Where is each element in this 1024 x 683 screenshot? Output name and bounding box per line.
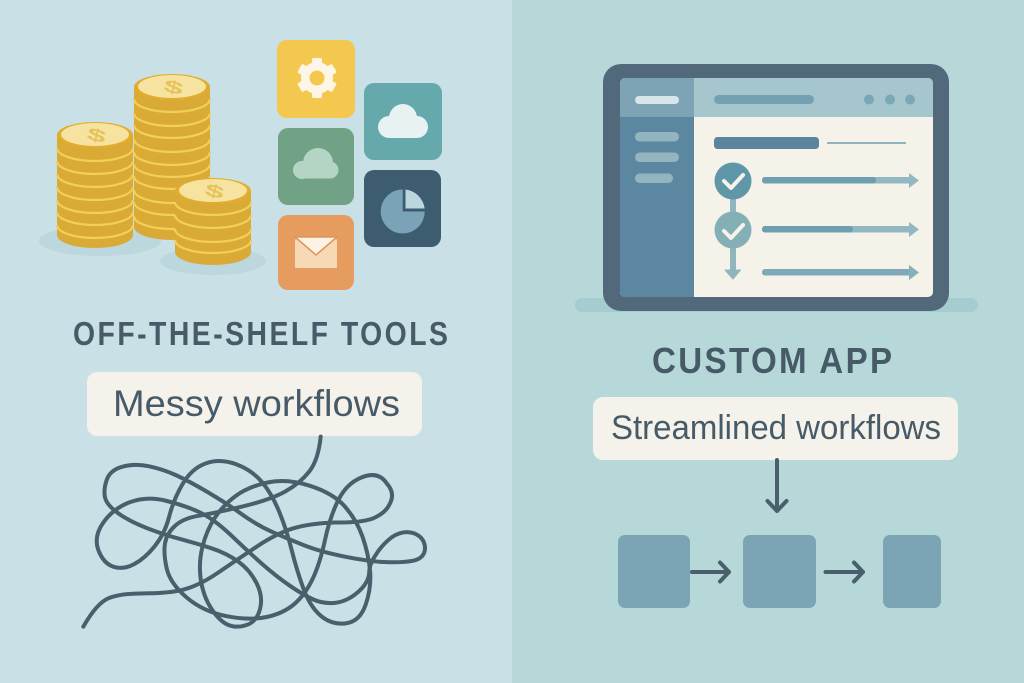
- process step 3: [883, 535, 941, 608]
- label: streamlined workflows: [593, 397, 958, 460]
- label: messy workflows: [87, 372, 422, 436]
- icon: green cloud tile: [278, 128, 354, 205]
- illustration: tablet with app: [575, 64, 978, 312]
- icon: stacks of coins: [39, 74, 266, 275]
- app content area: [620, 78, 933, 297]
- process step 2: [743, 535, 816, 608]
- coin stack: left: [57, 122, 133, 248]
- icon: yellow gear tile: [277, 40, 355, 118]
- heading: custom app: CUSTOM APP: [652, 342, 892, 381]
- icon: orange envelope tile: [278, 215, 354, 290]
- coin stack: tall: $: [162, 75, 185, 99]
- illustration: tangled line: [83, 437, 425, 627]
- workflow steps with checks: [714, 162, 752, 279]
- coin stack: short: $: [203, 179, 226, 203]
- coin stack: tall: [134, 74, 210, 240]
- label: messy workflows: Messy workflows: [113, 383, 400, 424]
- panel: off-the-shelf tools: [0, 0, 512, 683]
- heading: off-the-shelf tools: OFF-THE-SHELF TOOLS: [73, 315, 448, 353]
- arrow: step 2 to 3: [826, 562, 863, 582]
- app header bar: [694, 78, 933, 117]
- progress arrow 2: [762, 222, 919, 237]
- arrow: down to process: [768, 460, 786, 511]
- app sidebar: [620, 78, 694, 297]
- progress arrow 1: [762, 173, 919, 188]
- icon: teal cloud tile: [364, 83, 442, 160]
- panel: custom app: [512, 0, 1024, 683]
- process step 1: [618, 535, 690, 608]
- progress arrow 3: [762, 265, 919, 280]
- coin stack: short: [175, 178, 251, 265]
- icon: navy pie chart tile: [364, 170, 441, 247]
- app title bar: [714, 137, 906, 149]
- label: streamlined workflows: Streamlined workflows: [611, 409, 941, 447]
- coin stack: left: $: [85, 123, 108, 147]
- arrow: step 1 to 2: [692, 562, 729, 582]
